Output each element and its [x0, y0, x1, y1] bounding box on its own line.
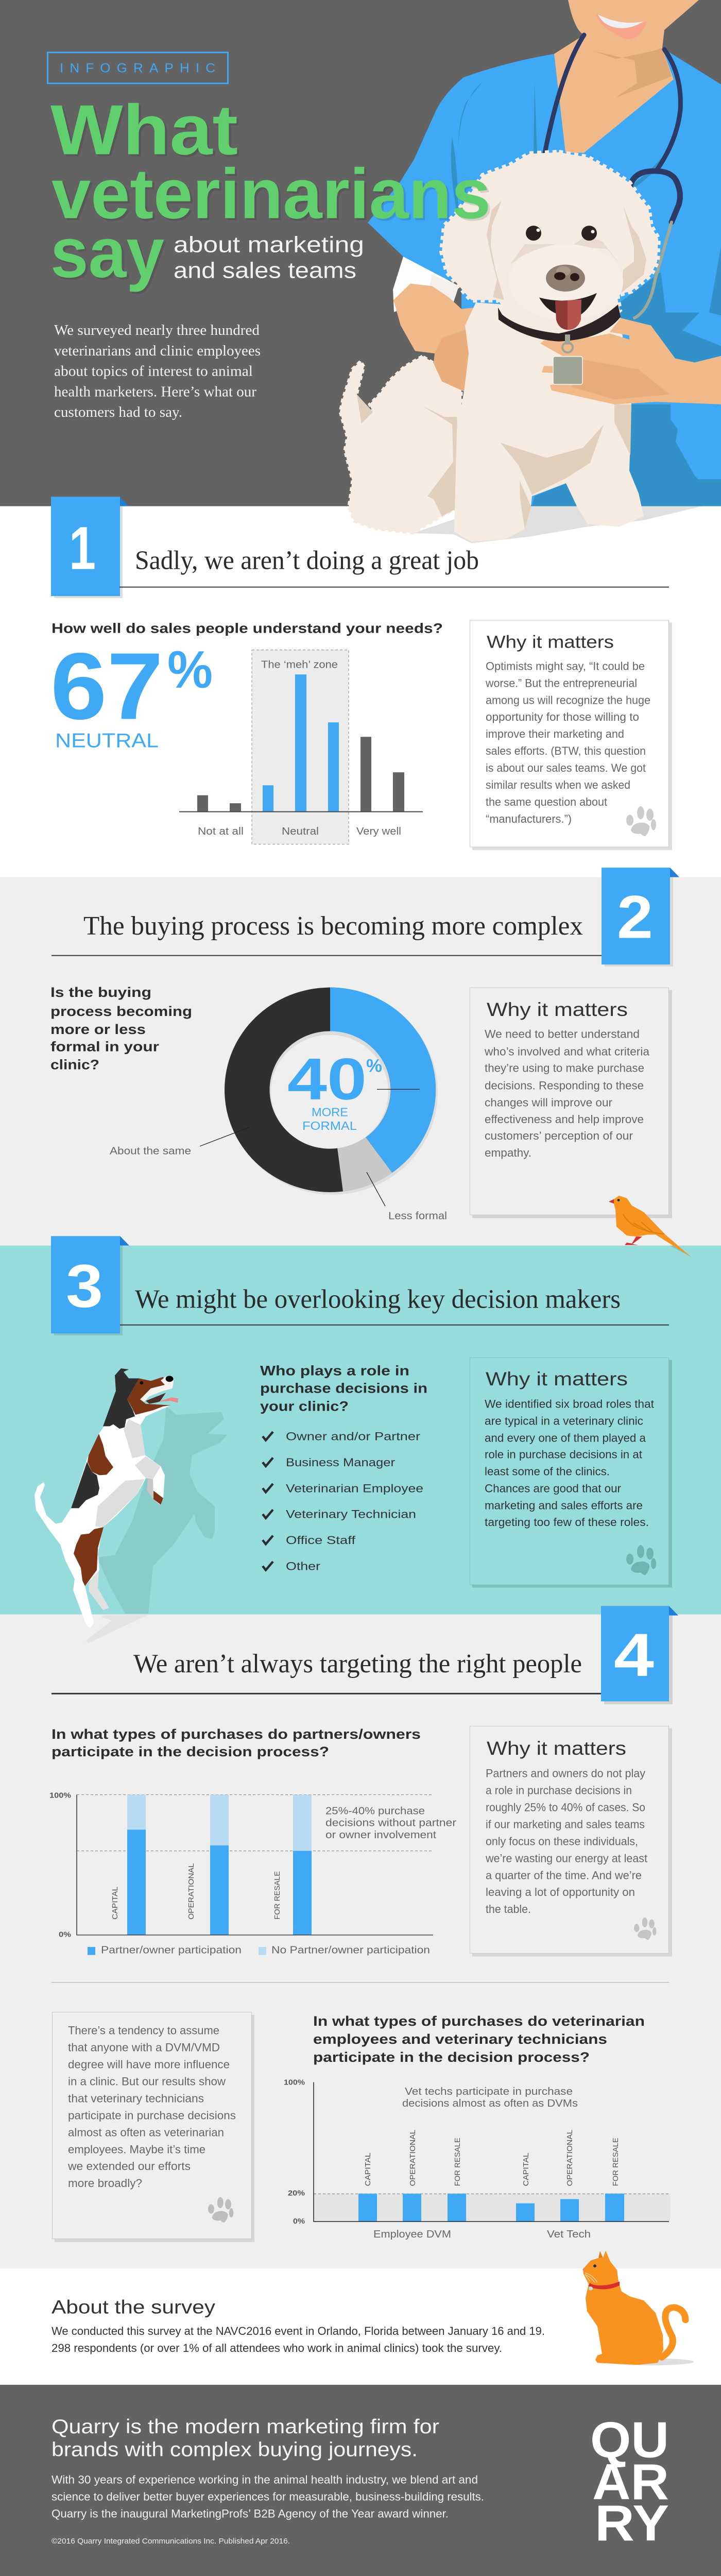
panel: why it matters 1: worse.” But the entrepreneurial — [485, 677, 637, 689]
logo: quarry: RY — [595, 2495, 669, 2552]
stethoscope — [545, 35, 680, 318]
stacked bar chart: partner/owner participation — [49, 1792, 456, 1956]
dog body shading — [95, 1419, 161, 1527]
stacked bar chart: partner/owner participation: OPERATIONAL — [187, 1863, 196, 1920]
heading 4: We aren’t always targeting the right people — [133, 1649, 582, 1679]
panel: why it matters 4: Partners and owners do not play — [486, 1767, 646, 1780]
checklist: roles: Veterinarian Employee — [286, 1482, 423, 1495]
question 3: your clinic? — [260, 1398, 349, 1414]
question 4b: participate in the decision process? — [313, 2049, 590, 2065]
dog head — [127, 1377, 171, 1415]
badge 3 — [51, 1236, 129, 1335]
stat: 67% neutral: 67 — [50, 633, 163, 739]
tag: infographic: INFOGRAPHIC — [60, 61, 215, 75]
logo: quarry: AR — [592, 2453, 669, 2510]
panel: why it matters 3 — [470, 1358, 672, 1587]
copyright: ©2016 Quarry Integrated Communications Inc. Published Apr 2016. — [52, 2537, 290, 2546]
question 4a: In what types of purchases do partners/owners — [52, 1726, 421, 1742]
other hind leg — [89, 1563, 109, 1610]
dog front body — [454, 302, 644, 541]
panel: vet tech note: participate in purchase decisions — [68, 2109, 236, 2122]
scrubs shading — [451, 82, 721, 506]
panel: why it matters 3: marketing and sales efforts are — [485, 1499, 643, 1512]
bar chart: DVM vs vet tech: OPERATIONAL — [566, 2130, 574, 2186]
main title: What — [50, 90, 238, 170]
donut chart: MORE — [312, 1106, 348, 1120]
donut chart: FORMAL — [302, 1120, 357, 1133]
footer headline: Quarry is the modern marketing firm for — [52, 2415, 439, 2438]
dog hindquarters and tail — [340, 356, 461, 533]
panel: why it matters 2: We need to better understand — [485, 1028, 640, 1040]
subtitle: about marketing — [174, 232, 364, 257]
stat: 67% neutral — [50, 633, 213, 752]
intro paragraph: about topics of interest to animal — [54, 364, 253, 380]
footer headline: brands with complex buying journeys. — [52, 2438, 418, 2461]
panel: why it matters 2: effectiveness and help improve — [485, 1113, 644, 1126]
intro paragraph: We surveyed nearly three hundred — [54, 323, 260, 338]
panel: vet tech note: employees. Maybe it’s time — [68, 2143, 205, 2156]
intro paragraph: health marketers. Here’s what our — [54, 384, 256, 400]
checklist: roles: Veterinary Technician — [286, 1508, 416, 1521]
tag: infographic — [47, 53, 228, 83]
stat: 67% neutral: % — [167, 640, 213, 699]
panel: why it matters 3: and every one of them played a — [485, 1432, 646, 1444]
panel: why it matters 2: they’re using to make purchase — [485, 1062, 644, 1074]
badge 2 — [602, 868, 679, 967]
badge 1 — [51, 497, 129, 598]
question 3 — [260, 1363, 427, 1414]
checklist: roles: Business Manager — [286, 1456, 396, 1469]
illustration: orange cat — [583, 2250, 694, 2365]
bar chart: understanding: The ‘meh’ zone — [261, 659, 338, 670]
bar chart: DVM vs vet tech: 20% — [288, 2190, 305, 2198]
panel: vet tech note: degree will have more influence — [68, 2058, 230, 2071]
panel: why it matters 4: the table. — [486, 1903, 531, 1916]
panel: why it matters 1 — [470, 620, 672, 850]
footer headline — [52, 2415, 439, 2461]
dog tail and body — [35, 1405, 171, 1628]
dog snout — [509, 244, 623, 320]
checklist: roles: Other — [286, 1560, 321, 1572]
panel: why it matters 1: among us will recognize the huge — [486, 694, 650, 706]
intro paragraph: veterinarians and clinic employees — [54, 343, 261, 359]
panel: why it matters 4: leaving a lot of opportunity on — [486, 1886, 635, 1899]
panel: why it matters 3: Why it matters — [486, 1368, 628, 1389]
hero text — [47, 53, 491, 420]
bar chart: understanding: Neutral — [282, 825, 319, 837]
chart annotation: or owner involvement — [325, 1829, 436, 1841]
chart annotation: decisions almost as often as DVMs — [402, 2097, 578, 2109]
logo: quarry — [590, 2412, 669, 2552]
floor shadow — [86, 1615, 148, 1643]
head shading — [487, 201, 646, 300]
hindquarter shading — [357, 395, 461, 516]
left arm — [393, 283, 475, 392]
illustration: orange bird — [609, 1196, 691, 1257]
panel: why it matters 2 — [470, 988, 672, 1218]
panel: vet tech note: in a clinic. But our results show — [68, 2075, 226, 2088]
dog eyes — [526, 226, 597, 241]
bar chart: understanding — [179, 650, 423, 844]
panel: why it matters 1: similar results when we asked — [486, 778, 630, 791]
panel: why it matters 4: if our marketing and sales teams — [486, 1818, 645, 1831]
subtitle — [174, 232, 364, 283]
dog shadow silhouette — [99, 1406, 228, 1614]
panel: vet tech note: more broadly? — [68, 2177, 142, 2190]
dog head — [442, 152, 658, 333]
donut chart: About the same — [110, 1145, 191, 1157]
panel: why it matters 3: are typical in a veterinary clinic — [485, 1415, 643, 1427]
question 4a: participate in the decision process? — [52, 1743, 329, 1759]
section 1 — [50, 497, 672, 850]
bar chart: DVM vs vet tech: 100% — [284, 2079, 305, 2087]
question 2: Is the buying — [50, 984, 151, 1000]
donut chart: % — [366, 1056, 382, 1076]
main title: veterinarians — [52, 154, 491, 233]
footer body: With 30 years of experience working in the animal health industry, we blend art and — [52, 2473, 478, 2486]
bar chart: DVM vs vet tech: 0% — [293, 2217, 305, 2226]
vet scrubs — [368, 48, 721, 506]
illustration: jumping dog — [35, 1368, 228, 1643]
chart annotation: decisions without partner — [325, 1817, 456, 1828]
badge 4: 4 — [614, 1621, 654, 1689]
badge 2: 2 — [617, 883, 653, 951]
donut chart: Less formal — [388, 1210, 447, 1222]
panel: vet tech note: that anyone with a DVM/VMD — [68, 2041, 220, 2054]
panel: vet tech note: almost as often as veterinarian — [68, 2126, 224, 2139]
heading 1: Sadly, we aren’t doing a great job — [135, 546, 479, 575]
dog tag — [553, 334, 582, 384]
donut callout lines — [200, 1089, 420, 1206]
dog black saddle — [71, 1462, 99, 1508]
question 3: Who plays a role in — [260, 1363, 409, 1378]
bar chart: understanding: Not at all — [198, 825, 244, 837]
footer body: Quarry is the inaugural MarketingProfs’ B2B Agency of the Year award winner. — [52, 2507, 449, 2520]
bar chart: understanding: Very well — [356, 825, 401, 837]
sleeve — [393, 257, 459, 312]
smile — [595, 13, 647, 39]
panel: why it matters 4: only focus on these individuals, — [486, 1835, 638, 1848]
panel: why it matters 1: the same question about — [486, 795, 608, 808]
checklist: roles: Office Staff — [286, 1534, 356, 1547]
question 2: clinic? — [50, 1057, 99, 1072]
question 4b — [313, 2013, 645, 2065]
bar chart: DVM vs vet tech — [284, 2079, 670, 2240]
panel: why it matters 2: empathy. — [485, 1146, 531, 1159]
section 2 — [50, 868, 679, 1222]
stacked bar chart: partner/owner participation: 0% — [59, 1931, 71, 1939]
icon: paw — [208, 2197, 233, 2223]
panel: why it matters 3: targeting too few of these roles. — [485, 1516, 649, 1529]
front body shading — [501, 404, 631, 529]
bar chart: DVM vs vet tech: Employee DVM — [373, 2228, 451, 2240]
text block: We conducted this survey at the NAVC2016 event in Orlando, Florida between January 16 and 19. — [52, 2325, 545, 2337]
panel: why it matters 4: a quarter of the time. And we’re — [486, 1869, 642, 1882]
section 3 — [35, 1236, 672, 1643]
panel: why it matters 1: opportunity for those willing to — [486, 711, 639, 723]
right hand — [540, 318, 721, 404]
badge 1: 1 — [69, 514, 96, 582]
dog mouth and tongue — [539, 293, 597, 330]
chart annotation — [402, 2086, 578, 2109]
footer body: science to deliver better buyer experiences for measurable, business-building results. — [52, 2490, 484, 2503]
intro paragraph — [54, 323, 261, 420]
panel: why it matters 4: we’re wasting our energy at least — [485, 1852, 648, 1865]
panel: vet tech note: that veterinary technicians — [68, 2092, 204, 2105]
panel: why it matters 1: Optimists might say, “It could be — [486, 660, 645, 672]
dog ear and neck — [103, 1368, 139, 1429]
panel: why it matters 3: role in purchase decisions in at — [485, 1448, 643, 1461]
panel: vet tech note — [53, 2012, 254, 2242]
panel: why it matters 4 — [470, 1726, 672, 1956]
panel: why it matters 4: roughly 25% to 40% of cases. So — [486, 1801, 645, 1814]
stacked bar chart: partner/owner participation: CAPITAL — [111, 1887, 119, 1920]
bar chart: DVM vs vet tech: CAPITAL — [364, 2153, 372, 2186]
heading: About the survey — [52, 2296, 215, 2317]
bar chart: DVM vs vet tech: CAPITAL — [522, 2153, 530, 2186]
stat: 67% neutral: NEUTRAL — [55, 730, 159, 752]
heading 2: The buying process is becoming more complex — [83, 911, 583, 941]
question 1: How well do sales people understand your needs? — [52, 620, 443, 636]
text block: 298 respondents (or over 1% of all attendees who work in animal clinics) took the survey. — [52, 2342, 502, 2354]
bar chart: DVM vs vet tech: Vet Tech — [547, 2228, 591, 2240]
question 2: process becoming — [50, 1003, 192, 1019]
dog brown patches — [74, 1434, 163, 1586]
panel: why it matters 3: We identified six broad roles that — [485, 1398, 655, 1410]
dog collar — [498, 304, 621, 342]
panel: vet tech note: we extended our efforts — [67, 2160, 191, 2173]
chart legend: Partner/owner participation — [101, 1944, 242, 1956]
panel: why it matters 1: is about our sales teams. We got — [486, 761, 646, 774]
panel: why it matters 3: Chances are good that our — [485, 1482, 621, 1495]
icon: paw — [626, 806, 656, 836]
panel: why it matters 1: Why it matters — [487, 633, 614, 652]
heading 3: We might be overlooking key decision makers — [135, 1284, 621, 1314]
stacked bar chart: partner/owner participation: FOR RESALE — [273, 1871, 282, 1920]
chart annotation — [325, 1805, 456, 1841]
icon: paw — [626, 1545, 656, 1575]
panel: why it matters 4: Why it matters — [487, 1738, 626, 1759]
checklist: roles — [263, 1430, 423, 1572]
chart legend: No Partner/owner participation — [271, 1944, 430, 1956]
skin: neck and chest — [554, 0, 699, 153]
panel: why it matters 1: improve their marketing and — [486, 727, 624, 740]
logo: quarry: QU — [590, 2412, 669, 2468]
question 2 — [50, 984, 192, 1072]
dog nose — [546, 265, 585, 292]
question 3: purchase decisions in — [260, 1380, 427, 1396]
neck shadow — [593, 48, 672, 97]
panel: why it matters 2: who’s involved and what criteria — [484, 1045, 649, 1058]
panel: why it matters 1: “manufacturers.”) — [486, 812, 572, 825]
question 4b: employees and veterinary technicians — [313, 2031, 607, 2047]
donut center value: 40 — [287, 1046, 367, 1112]
intro paragraph: customers had to say. — [54, 404, 182, 420]
dog ground shadow — [413, 506, 702, 543]
footer body — [52, 2473, 484, 2520]
about the survey — [52, 2250, 694, 2365]
panel: why it matters 2: Why it matters — [487, 998, 628, 1020]
footer — [52, 2412, 669, 2552]
illustration: vet holding poodle — [340, 0, 721, 543]
section 4 — [49, 1606, 678, 2242]
question 4a — [52, 1726, 421, 1759]
badge 4 — [601, 1606, 678, 1704]
chart annotation: Vet techs participate in purchase — [405, 2086, 573, 2097]
donut chart — [110, 988, 447, 1222]
panel: why it matters 4: a role in purchase decisions in — [486, 1784, 632, 1797]
panel: vet tech note: There’s a tendency to assume — [68, 2024, 219, 2037]
bar chart: DVM vs vet tech: OPERATIONAL — [409, 2130, 417, 2186]
text block — [52, 2325, 545, 2354]
bar chart: DVM vs vet tech: FOR RESALE — [612, 2138, 620, 2186]
panel: why it matters 3: least some of the clinics. — [485, 1465, 610, 1478]
main title: say — [50, 213, 164, 292]
panel: why it matters 1: sales efforts. (BTW, this question — [486, 744, 646, 757]
chart annotation: 25%-40% purchase — [325, 1805, 425, 1817]
chart legend — [88, 1944, 430, 1956]
badge 3: 3 — [66, 1252, 103, 1320]
stacked bar chart: partner/owner participation: 100% — [49, 1792, 71, 1800]
panel: why it matters 2: decisions. Responding to these — [485, 1079, 644, 1092]
question 4b: In what types of purchases do veterinarian — [313, 2013, 645, 2029]
main title — [50, 90, 491, 292]
icon: paw — [634, 1918, 656, 1940]
checklist: roles: Owner and/or Partner — [286, 1430, 421, 1443]
question 2: more or less — [50, 1021, 146, 1037]
panel: why it matters 2: changes will improve our — [485, 1096, 612, 1109]
subtitle: and sales teams — [174, 258, 356, 283]
panel: why it matters 2: customers’ perception of our — [485, 1130, 633, 1142]
bar chart: DVM vs vet tech: FOR RESALE — [454, 2138, 462, 2186]
question 2: formal in your — [50, 1039, 159, 1055]
